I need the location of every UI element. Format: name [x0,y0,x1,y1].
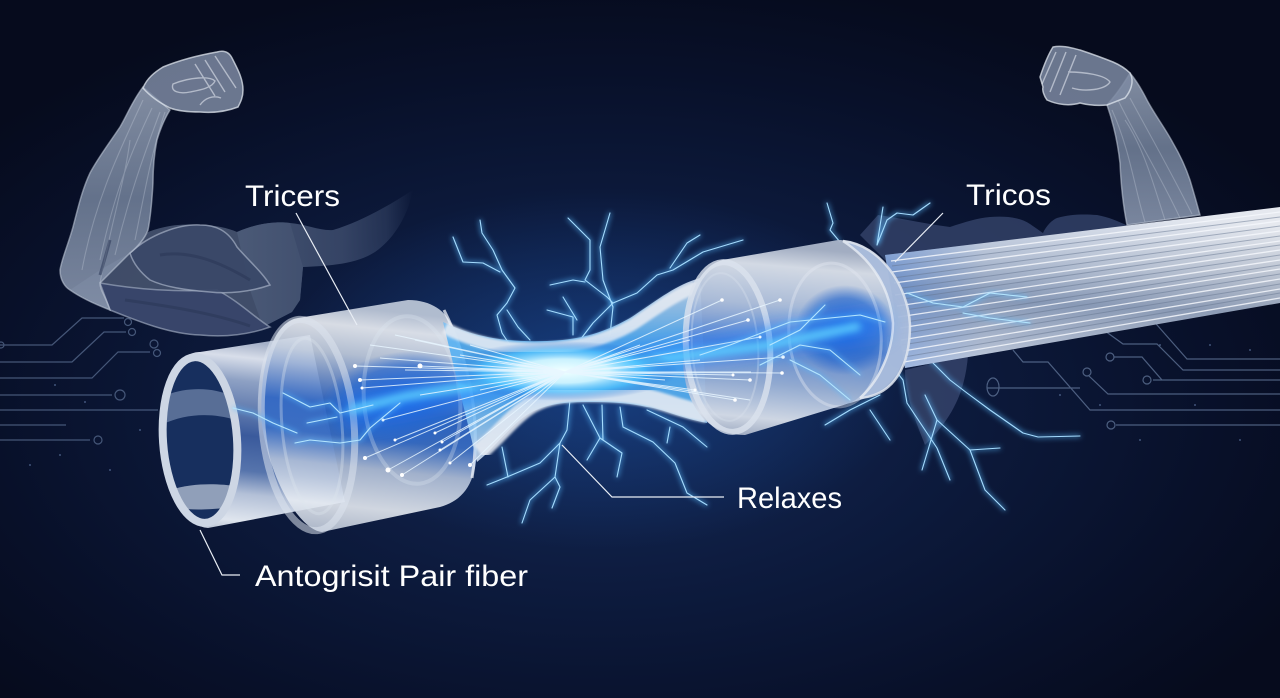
circuit lines left [0,318,160,444]
fiber bundle [885,207,1280,368]
right sleeve body [683,240,909,435]
lightning across sleeves [233,293,1030,443]
left triceps [100,283,270,336]
right flexing arm [860,46,1200,445]
sleeve rear ring [357,312,467,488]
neck upper wall [445,286,700,348]
lightning behind tube [453,203,1080,523]
Tricers text: Tricers [245,180,340,213]
Relaxes leader line [562,445,724,497]
energy beam [345,322,885,412]
right arm fist [1040,46,1132,105]
sleeve body [261,300,477,532]
central glow [448,341,678,401]
collar band [843,241,910,398]
label: Tricos [895,179,1051,262]
beam light [350,326,860,410]
sleeve front ring [253,315,363,535]
fibers right fan [565,300,783,400]
label: Antogrisit Pair fiber [200,530,528,593]
Antogrisit text: Antogrisit Pair fiber [255,560,528,593]
tube opening ring [157,355,243,525]
opening rim [157,355,243,525]
label: Relaxes [562,445,842,515]
left upper arm trailing muscle [237,190,413,327]
sleeve inner ring [274,336,350,516]
fibers left fan [355,335,565,475]
fiber end dots right [694,298,785,402]
left arm base silhouette [70,222,303,336]
left forearm [60,87,170,310]
sleeve right edge [444,310,475,478]
Tricers leader line [296,213,357,325]
label: Tricers [245,180,357,325]
left fist finger lines [172,56,236,105]
Relaxes text: Relaxes [737,482,842,515]
circuit lines right [987,317,1280,429]
left arm fist [143,51,243,112]
Antogrisit leader line [200,530,240,575]
sleeve blue core [313,339,487,461]
left flexing arm [60,51,413,336]
small tube body [162,335,345,528]
fiber end dots left [353,364,472,477]
beam glow [345,322,885,412]
collar inner edge [843,241,893,398]
right forearm muscle lines [1112,98,1192,222]
right lower muscle [905,355,968,445]
left sleeve [253,300,487,535]
right sleeve inner ring [687,271,763,423]
bundle blue reflection [885,207,1280,368]
left arm dark muscle shading [100,240,250,326]
left tube end section [162,335,345,528]
left forearm muscle lines [82,100,165,283]
right shoulder [860,214,1130,265]
bundle body [885,207,1280,368]
bundle streaks [891,212,1280,362]
neck body [443,278,707,462]
Tricos leader line [895,213,943,262]
blue halo behind lightning [280,190,920,550]
left biceps [130,225,270,293]
neck lower wall [479,393,707,452]
interior band highlight [163,389,236,424]
right forearm [1107,73,1200,225]
narrowed neck [443,278,707,462]
background dots [29,344,1251,471]
right sleeve dome [783,259,887,411]
opening interior [157,355,243,525]
right fist finger lines [1042,52,1110,95]
right sleeve [680,240,909,435]
right collar [843,241,910,398]
collar outer edge [843,241,910,398]
Tricos text: Tricos [966,179,1051,212]
interior low band [170,484,236,510]
right sleeve opening ring [680,259,776,435]
right sleeve blue core [795,285,895,375]
